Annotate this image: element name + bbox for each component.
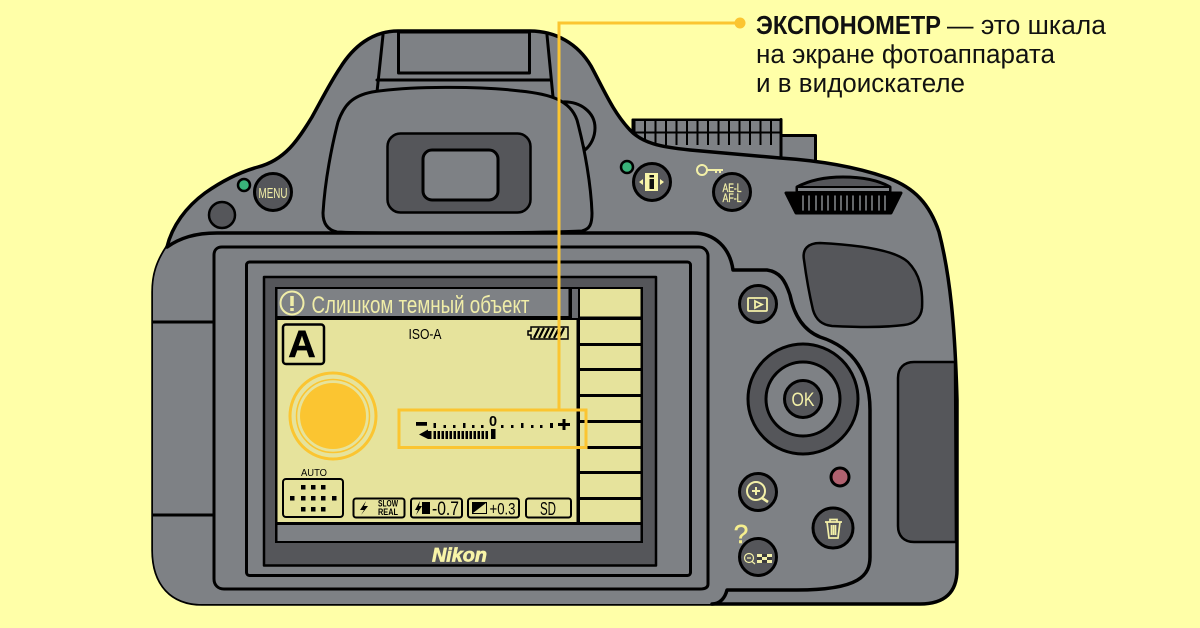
hinge panel frame <box>214 247 708 589</box>
info button <box>634 164 670 200</box>
LCD main area <box>278 320 576 522</box>
Nikon logo: Nikon <box>432 546 487 566</box>
right header strip <box>572 289 578 318</box>
zero mark: 0 <box>489 414 497 430</box>
under-exposure bar <box>419 429 496 439</box>
zoom out button <box>740 538 776 576</box>
SD badge: SD <box>540 499 556 519</box>
right side rubber pad <box>898 362 956 542</box>
callout text <box>756 12 1107 98</box>
flash slow badge: REAL <box>378 507 398 517</box>
icon: trash <box>825 520 842 538</box>
icon: zoom in <box>747 482 768 502</box>
ISO label: ISO-A <box>408 326 442 343</box>
AE-L label: AE-L <box>722 181 742 195</box>
eyecup <box>323 87 592 233</box>
question mark: ? <box>734 519 748 549</box>
top dial <box>786 177 901 213</box>
flash compensation badge <box>411 498 462 520</box>
knob behind eyepiece <box>562 102 595 150</box>
zoom in button <box>740 474 776 510</box>
icon: play <box>748 298 767 311</box>
leader line <box>559 23 740 410</box>
dark screen surround <box>264 277 656 566</box>
green LED right <box>621 161 633 173</box>
LCD screen <box>275 287 643 543</box>
line two: на экране фотоаппарата <box>756 41 1056 69</box>
screen bezel <box>246 262 690 576</box>
plus mark <box>558 419 570 430</box>
playback button <box>740 286 776 322</box>
trash button <box>813 508 853 548</box>
grip seams <box>153 322 214 515</box>
exposure meter scale <box>416 414 570 439</box>
record indicator <box>831 468 849 486</box>
leader line and callout <box>399 23 740 448</box>
callout dot <box>734 18 746 28</box>
camera body <box>153 31 957 604</box>
mode badge <box>283 324 324 366</box>
OK label: OK <box>792 390 815 411</box>
D-pad centre <box>766 362 840 436</box>
hot shoe housing <box>377 32 553 97</box>
mode badge: A <box>288 324 316 366</box>
term: ЭКСПОНОМЕТР <box>756 12 941 40</box>
front panel outline <box>153 233 870 604</box>
menu button <box>254 174 292 210</box>
screen frame <box>275 287 643 543</box>
rear grip pad <box>804 243 922 327</box>
power button <box>209 202 235 228</box>
exposure compensation badge <box>468 498 519 518</box>
warning icon <box>280 292 304 314</box>
OK button <box>784 380 822 418</box>
exposure compensation badge: +0.3 <box>490 500 516 518</box>
icon: key <box>697 165 723 175</box>
meter highlight <box>399 410 586 448</box>
line three: и в видоискателе <box>756 70 965 98</box>
icon: zoom out thumbnails <box>744 554 772 564</box>
bottom bar <box>278 525 640 541</box>
button labels <box>258 181 815 566</box>
body outline <box>153 31 957 604</box>
AF area label: AUTO <box>301 467 327 479</box>
AE-L button <box>714 174 750 210</box>
upper scale <box>416 422 484 428</box>
AF area grid <box>283 479 343 517</box>
SD badge <box>526 498 571 519</box>
side menu cells <box>580 289 640 522</box>
focus circle <box>290 373 376 459</box>
warning header <box>278 289 568 316</box>
green LED left <box>238 179 250 191</box>
battery icon <box>528 327 568 339</box>
icon: info <box>639 173 664 191</box>
flash compensation badge: -0.7 <box>432 499 459 520</box>
AF-L label: AF-L <box>722 191 742 205</box>
warning text: Слишком темный объект <box>312 292 530 319</box>
D-pad ring <box>748 344 858 454</box>
dial grille behind body <box>632 120 816 166</box>
flash slow badge: SLOW <box>378 498 398 508</box>
flash slow badge <box>354 498 404 518</box>
line one: — это шкала <box>947 12 1107 40</box>
eyepiece dark frame <box>388 134 530 212</box>
menu label: MENU <box>258 185 288 202</box>
eyepiece window <box>423 150 498 200</box>
